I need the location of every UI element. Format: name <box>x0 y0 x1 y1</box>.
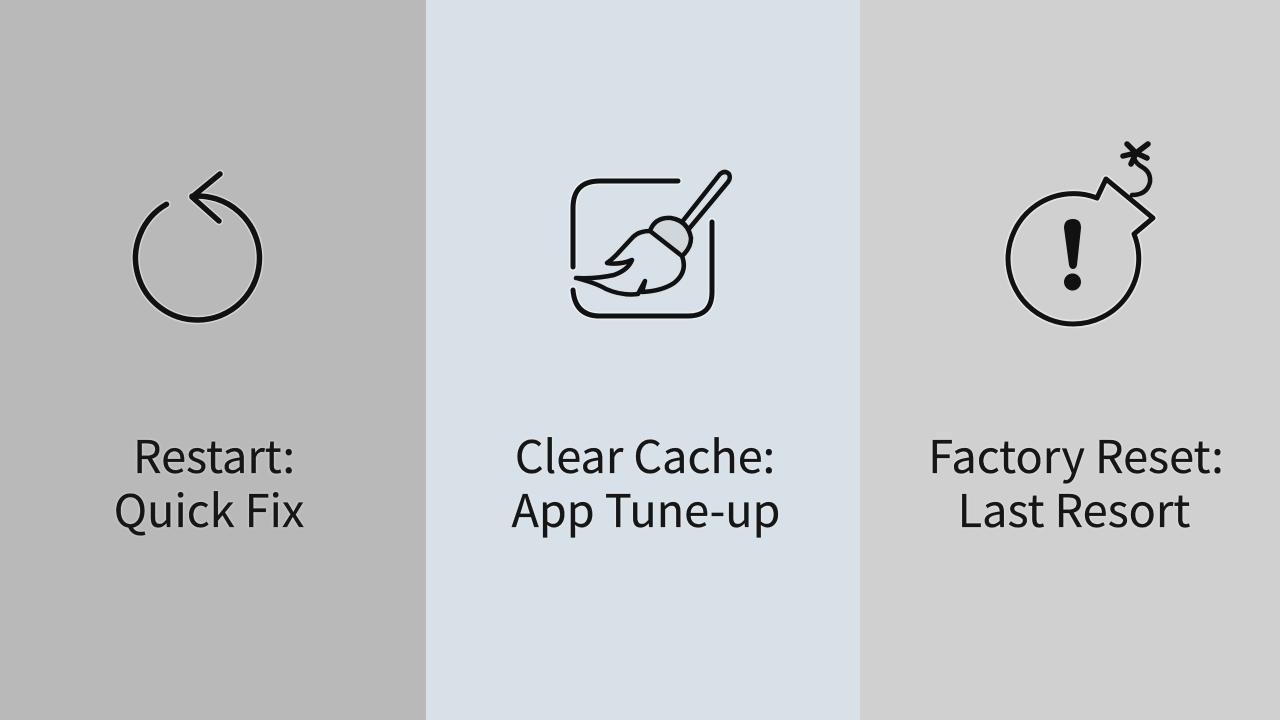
panel: factory reset <box>860 0 1280 720</box>
label: clear cache: App Tune-up <box>512 475 780 540</box>
icon: broom in rounded square <box>573 172 730 316</box>
label: clear cache <box>512 421 780 540</box>
label: factory reset: Last Resort <box>958 475 1190 540</box>
label: restart: Quick Fix <box>114 475 304 540</box>
panel: restart <box>0 0 426 720</box>
icon: restart arrow <box>135 174 260 320</box>
panel: clear cache <box>426 0 860 720</box>
label: restart <box>114 421 304 540</box>
icon: bomb with warning mark <box>1008 144 1153 324</box>
label: restart: Restart: <box>133 421 295 486</box>
label: clear cache: Clear Cache: <box>515 421 775 486</box>
label: factory reset: Factory Reset: <box>928 421 1224 486</box>
label: factory reset <box>928 421 1224 540</box>
